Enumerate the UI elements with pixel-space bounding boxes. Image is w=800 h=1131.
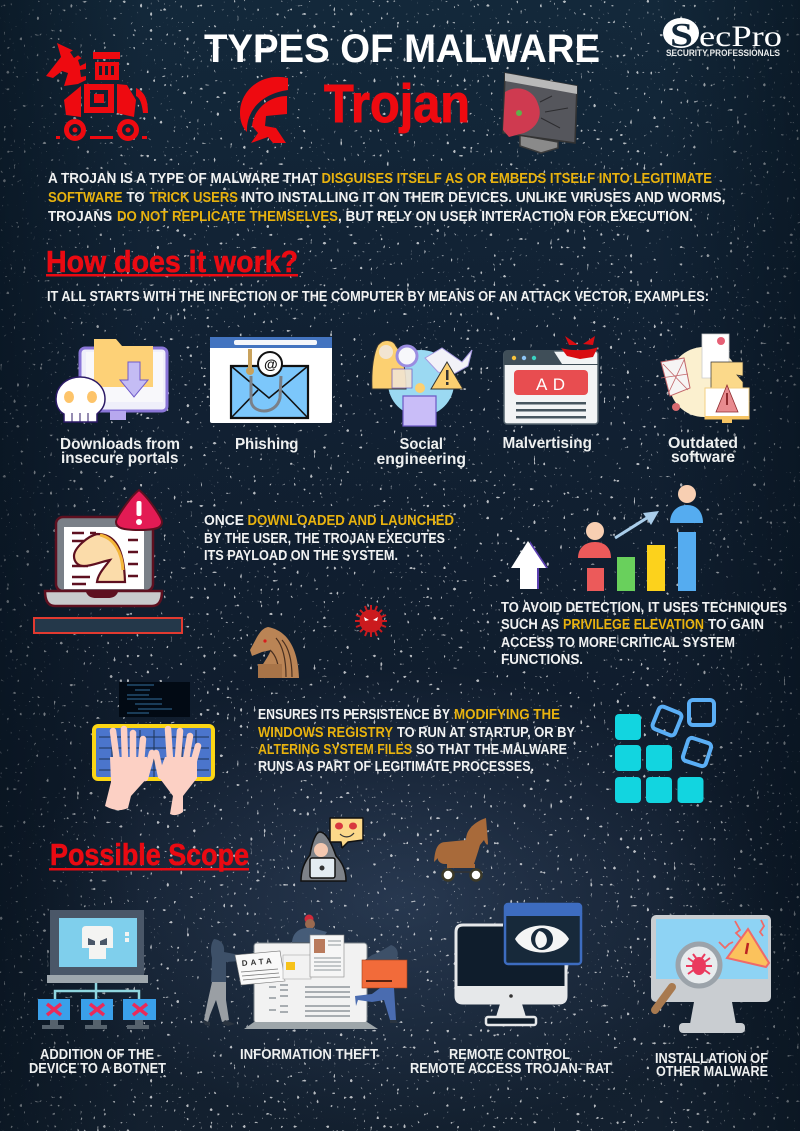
text block: payload: DOWNLOADED AND LAUNCHED	[248, 513, 454, 529]
text block: persistence	[258, 707, 575, 775]
text block: persistence: WINDOWS REGISTRY	[258, 725, 393, 741]
label: install other malware	[655, 1051, 768, 1080]
icon: malvertising: AD	[536, 375, 565, 394]
text block: privilege elevation: TO GAIN	[708, 617, 764, 633]
intro paragraph: , BUT RELY ON USER INTERACTION FOR EXECUTION.	[338, 209, 693, 225]
icon: spartan helmet	[240, 77, 288, 143]
text block: persistence: SO THAT THE MALWARE	[416, 742, 567, 758]
label: remote control: REMOTE CONTROL	[449, 1047, 570, 1063]
intro paragraph: INTO INSTALLING IT ON THEIR DEVICES. UNLIKE VIRUSES AND WORMS,	[242, 190, 726, 206]
icon: phishing	[210, 337, 332, 423]
illustration: information theft	[203, 914, 407, 1029]
text block: payload: BY THE USER, THE TROJAN EXECUTES	[204, 531, 445, 547]
logo: SecPro: ecPro	[699, 20, 782, 53]
label: remote control	[410, 1047, 611, 1077]
heading: Trojan: Trojan	[324, 74, 470, 134]
title: TYPES OF MALWARE	[204, 27, 600, 71]
text block: privilege elevation: SUCH AS	[501, 617, 559, 633]
label: malvertising: Malvertising	[502, 435, 592, 452]
attack vector intro line: IT ALL STARTS WITH THE INFECTION OF THE COMPUTER BY MEANS OF AN ATTACK VECTOR, EXAMPLES:	[47, 289, 709, 305]
intro paragraph: SOFTWARE	[48, 190, 123, 206]
icon: red virus	[355, 605, 387, 637]
intro paragraph: DISGUISES ITSELF AS OR EMBEDS ITSELF INTO LEGITIMATE	[322, 171, 712, 187]
left thief	[203, 939, 240, 1026]
label: social engineering: Social	[400, 436, 443, 453]
label: outdated software	[668, 435, 738, 466]
logo: SecPro: S	[670, 17, 693, 54]
label: botnet: ADDITION OF THE	[40, 1047, 154, 1063]
label: downloads: insecure portals	[61, 450, 178, 467]
data sheet	[235, 951, 285, 985]
intro paragraph: A TROJAN IS A TYPE OF MALWARE THAT	[48, 171, 318, 187]
icon: phishing: @	[264, 356, 278, 372]
label: botnet: DEVICE TO A BOTNET	[29, 1061, 166, 1077]
icon: botnet monitor	[38, 910, 156, 1029]
text block: persistence: ENSURES ITS PERSISTENCE BY	[258, 707, 450, 723]
text block: privilege elevation	[501, 600, 787, 668]
icon: hacker with speech bubble	[301, 818, 363, 881]
icon: infected monitor	[503, 73, 577, 153]
intro paragraph: TROJANS	[48, 209, 112, 225]
icon: malvertising	[504, 336, 598, 424]
icon: cyan blocks	[615, 700, 714, 803]
intro paragraph	[48, 171, 726, 225]
label: phishing: Phishing	[235, 436, 298, 453]
right thief	[355, 945, 407, 1023]
icon: brown chess knight	[250, 627, 299, 678]
icon: hands on keyboard	[94, 726, 213, 815]
icon: laptop with trojan horse and warning	[45, 490, 162, 606]
label: social engineering	[376, 436, 466, 468]
intro paragraph: TRICK USERS	[150, 190, 238, 206]
text block: privilege elevation: ACCESS TO MORE CRITICAL SYSTEM	[501, 635, 735, 651]
icon: brown horse on wheels	[434, 818, 488, 880]
text block: privilege elevation: PRIVILEGE ELEVATION	[563, 617, 704, 633]
icon: outdated software	[661, 334, 749, 423]
label: downloads	[60, 436, 180, 467]
icon: up arrow	[511, 541, 548, 589]
icon: malware scan monitor	[651, 915, 771, 1033]
label: downloads: Downloads from	[60, 436, 180, 453]
text block: payload: ITS PAYLOAD ON THE SYSTEM.	[204, 548, 398, 564]
intro paragraph: TO	[126, 190, 144, 206]
text block: persistence: RUNS AS PART OF LEGITIMATE PROCESSES.	[258, 759, 534, 775]
label: outdated software: Outdated	[668, 435, 738, 452]
logo: SecPro	[663, 17, 782, 58]
text block: persistence: ALTERING SYSTEM FILES	[258, 742, 412, 758]
label: botnet	[29, 1047, 166, 1077]
text block: privilege elevation: FUNCTIONS.	[501, 652, 583, 668]
text block: persistence: MODIFYING THE	[454, 707, 560, 723]
loading bar	[34, 618, 182, 633]
logo: SecPro: SECURITY PROFESSIONALS	[666, 48, 780, 58]
data sheet: DATA	[241, 956, 272, 968]
icon: red trojan horse	[46, 43, 148, 139]
stolen documents	[310, 935, 344, 977]
top thief	[292, 914, 327, 942]
heading: How does it work?: How does it work?	[46, 244, 298, 279]
label: outdated software: software	[671, 449, 735, 466]
intro paragraph: DO NOT REPLICATE THEMSELVES	[117, 209, 338, 225]
heading: Possible Scope: Possible Scope	[50, 837, 249, 872]
label: information theft: INFORMATION THEFT	[240, 1047, 378, 1063]
icon: dark terminal window	[119, 682, 190, 717]
icon: remote control monitor	[456, 904, 581, 1025]
text block: persistence: TO RUN AT STARTUP, OR BY	[397, 725, 575, 741]
label: install other malware: OTHER MALWARE	[656, 1064, 768, 1080]
label: remote control: REMOTE ACCESS TROJAN- RAT	[410, 1061, 611, 1077]
text block: payload: ONCE	[204, 513, 244, 529]
text block: payload	[204, 513, 454, 564]
icon: social engineering	[372, 341, 472, 426]
label: social engineering: engineering	[376, 451, 466, 468]
icon: downloads from insecure portals	[56, 339, 167, 422]
label: install other malware: INSTALLATION OF	[655, 1051, 768, 1067]
icon: privilege elevation bar chart	[578, 485, 703, 591]
